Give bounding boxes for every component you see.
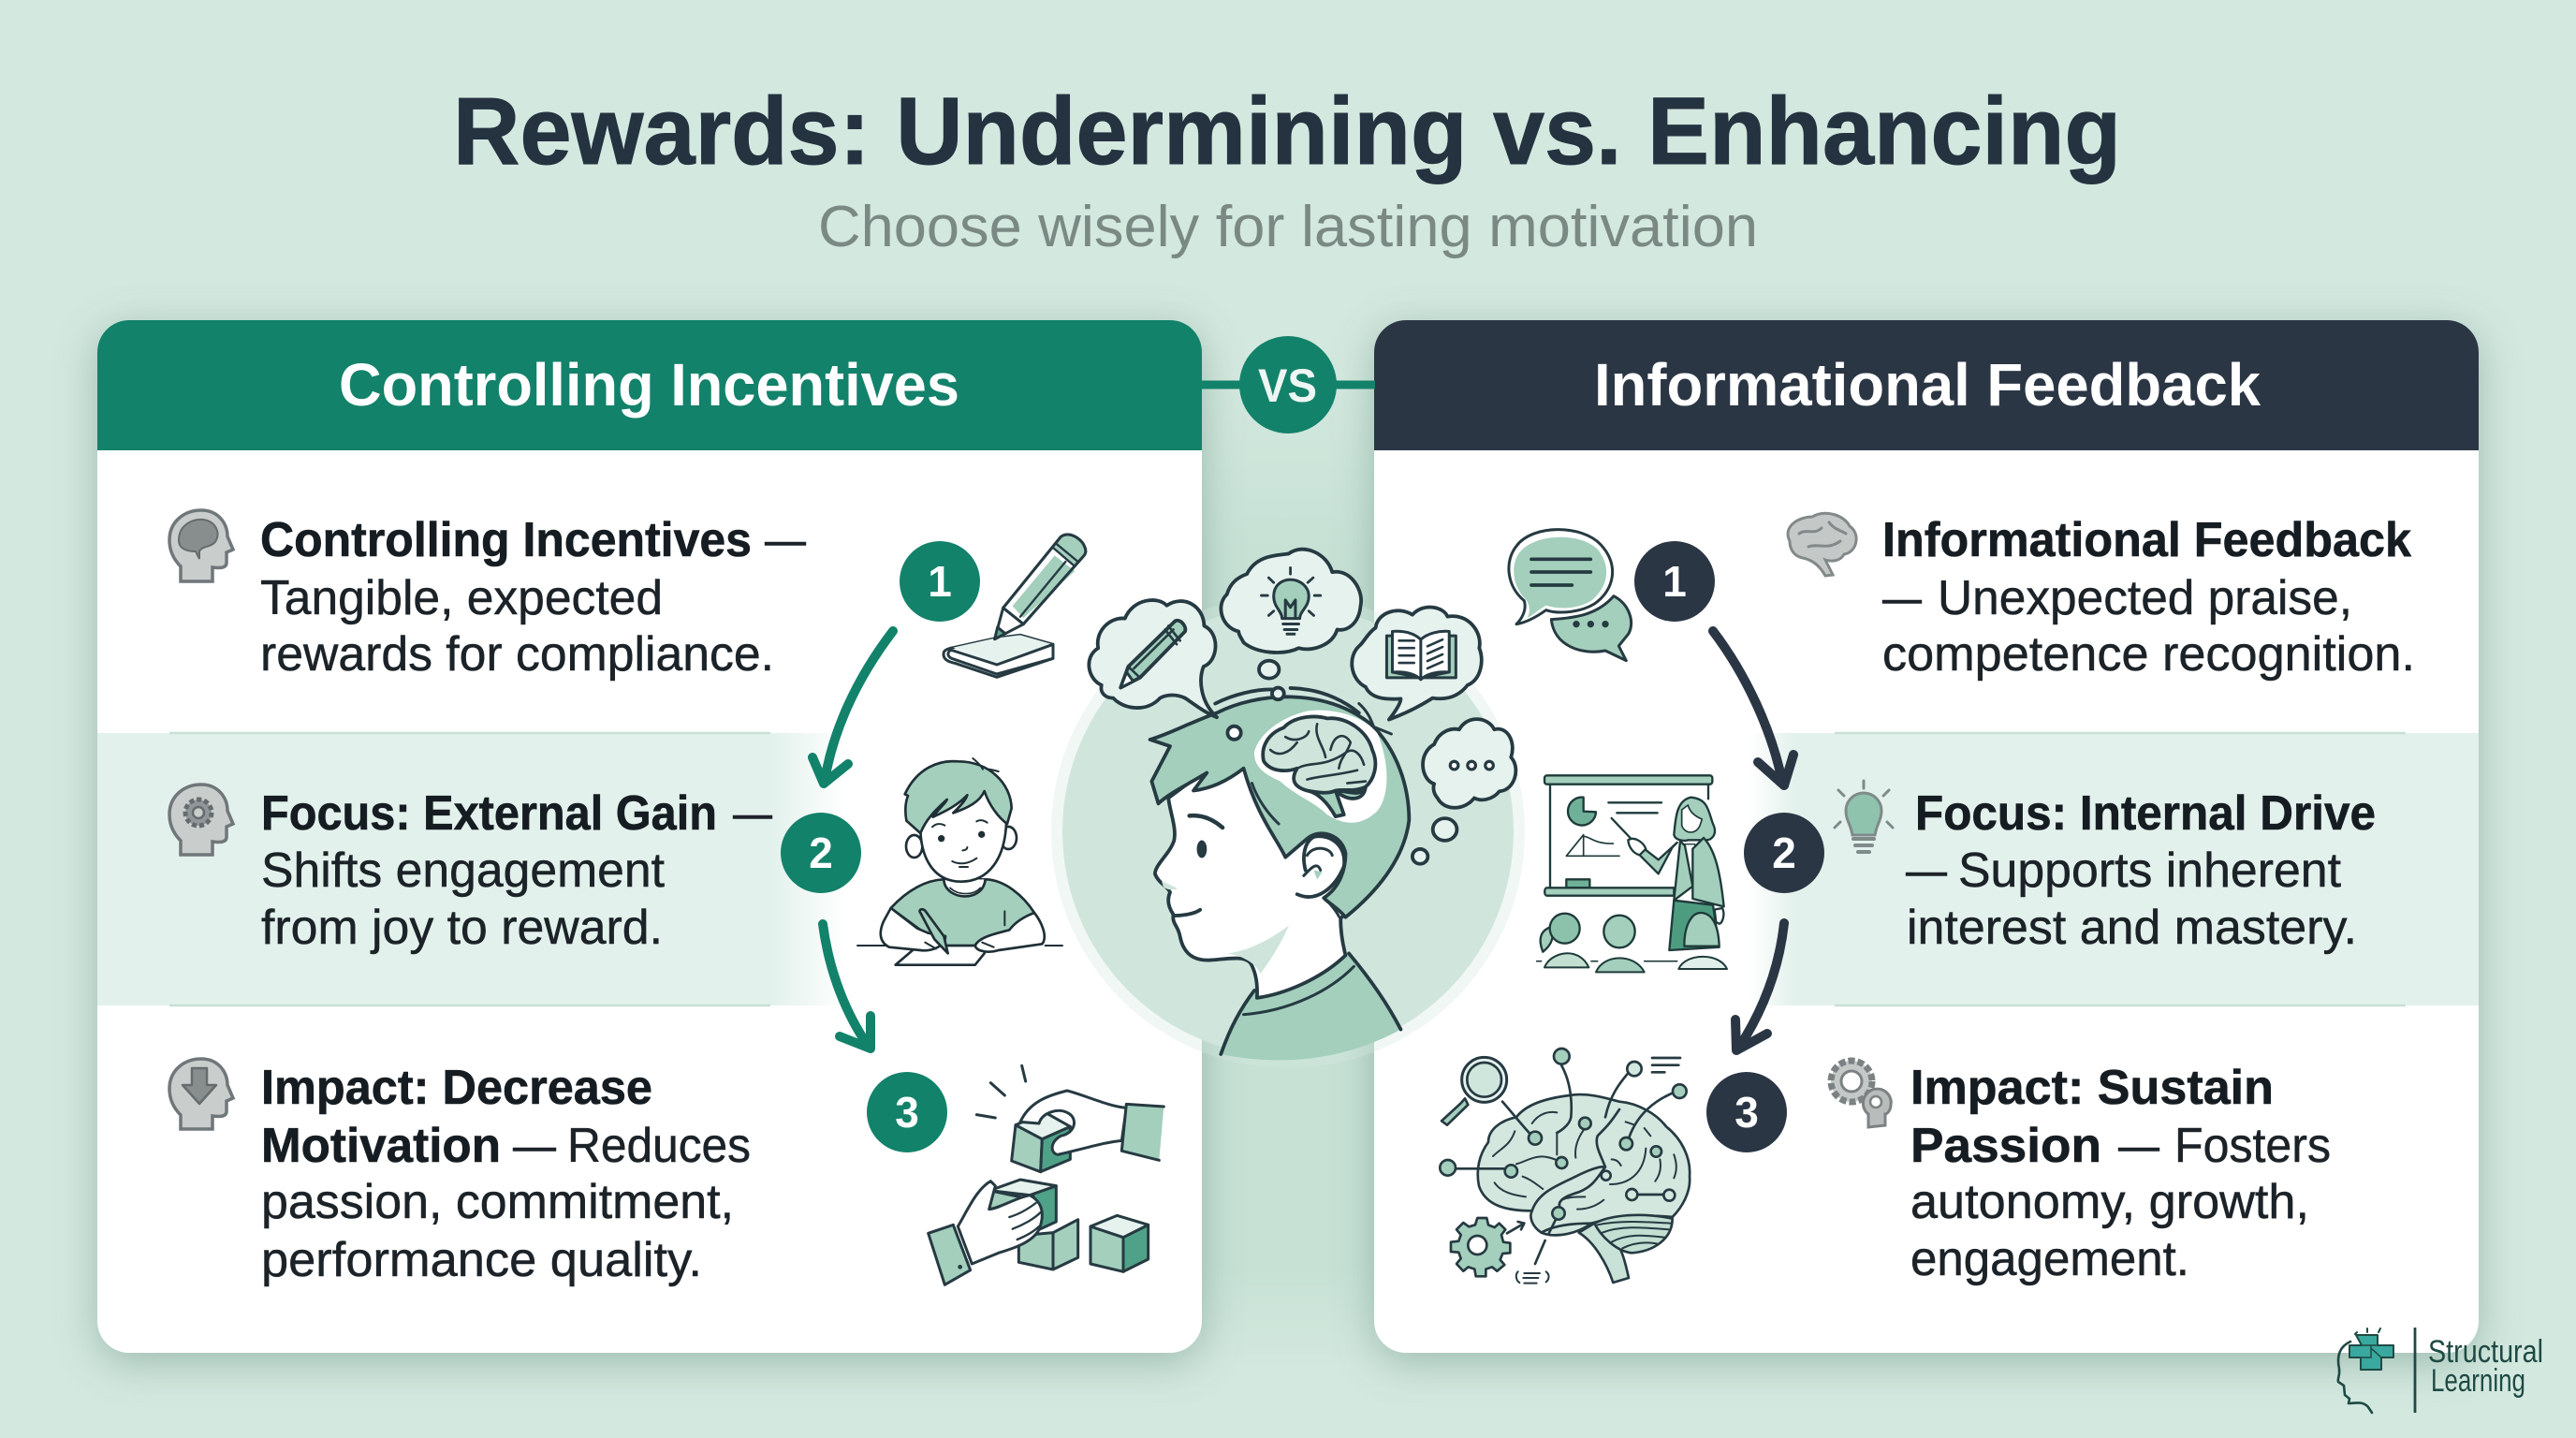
row 1 text — [1882, 513, 2415, 682]
logo: Structural Learning — [2338, 1328, 2543, 1413]
brain highlight — [1254, 711, 1386, 823]
row 2 text: Shifts engagement — [261, 844, 666, 898]
arrow 1 to 2 — [812, 631, 893, 784]
illustration: networked brain — [1440, 1049, 1690, 1284]
illustration: hands with blocks — [929, 1065, 1164, 1284]
middle band — [97, 733, 846, 1005]
step badge 3 — [1706, 1072, 1787, 1152]
logo: Structural Learning: Structural — [2428, 1334, 2543, 1370]
row 1 text: Unexpected praise, — [1938, 571, 2352, 625]
illustration: teacher and students — [1537, 775, 1727, 972]
row 3 text: — — [513, 1119, 556, 1173]
panel header: Controlling Incentives — [339, 351, 959, 418]
row 2 text — [1906, 786, 2376, 955]
panel: controlling incentives — [97, 320, 1202, 1353]
row 3 text — [261, 1061, 751, 1287]
step badge 1 — [900, 541, 980, 622]
icon: head with down arrow — [169, 1059, 233, 1129]
icon: light bulb — [1835, 781, 1893, 852]
title: Rewards: Undermining vs. Enhancing — [453, 78, 2121, 184]
panel header — [1374, 320, 2479, 450]
thought bubble circles — [1227, 661, 1456, 864]
icon: head with gear — [169, 785, 233, 855]
arrow 1 to 2 — [1713, 631, 1793, 785]
step badge 3: 3 — [895, 1088, 919, 1137]
row 2 text: Supports inherent — [1958, 844, 2342, 898]
illustration: child writing — [857, 758, 1062, 965]
row 3 text: Reduces — [567, 1119, 751, 1173]
icon: head with brain — [169, 510, 233, 581]
panel header: Informational Feedback — [1594, 351, 2261, 418]
row 3 text: autonomy, growth, — [1910, 1175, 2309, 1229]
illustration: central circle — [1051, 594, 1525, 1068]
shirt — [1221, 953, 1400, 1060]
step badge 1: 1 — [928, 557, 952, 606]
panel card — [97, 320, 1202, 1353]
cloud: open book — [1352, 607, 1482, 720]
row 3 text — [1910, 1061, 2331, 1286]
panel card — [1374, 320, 2479, 1353]
row 1 text: rewards for compliance. — [260, 627, 774, 682]
vs connector: VS — [1258, 360, 1317, 412]
arrow 2 to 3 — [823, 924, 871, 1049]
logo head icon — [2338, 1328, 2393, 1413]
cloud: pencil — [1089, 600, 1217, 717]
row 1 text: competence recognition. — [1882, 627, 2415, 682]
panel: informational feedback — [1374, 320, 2479, 1353]
cloud: light bulb — [1221, 550, 1361, 653]
row 1 text: — — [1882, 571, 1922, 625]
row 3 text: passion, commitment, — [261, 1175, 734, 1229]
illustration: child profile with thought bubbles — [1089, 550, 1515, 1060]
illustration: speech bubbles — [1509, 530, 1632, 661]
facial features — [1174, 815, 1222, 916]
row 3 text: — — [2118, 1119, 2159, 1173]
step badge 2 — [781, 813, 861, 893]
cloud: dots — [1423, 719, 1515, 808]
hair — [1150, 697, 1409, 917]
step badge 2: 2 — [809, 829, 833, 877]
middle band — [1750, 733, 2479, 1005]
row 3 text: engagement. — [1910, 1232, 2189, 1286]
row 3 text: Fosters — [2174, 1119, 2331, 1173]
brain — [1263, 717, 1375, 816]
vs connector — [1202, 336, 1375, 433]
row 3 text: Impact: Decrease — [261, 1061, 652, 1115]
icon: gear and head — [1831, 1061, 1891, 1127]
subtitle: Choose wisely for lasting motivation — [818, 195, 1758, 259]
row 2 text: interest and mastery. — [1907, 901, 2357, 955]
arrow 2 to 3 — [1735, 923, 1784, 1050]
row 3 text: Impact: Sustain — [1910, 1061, 2274, 1115]
row 1 text — [260, 513, 806, 682]
row 3 text: Passion — [1910, 1119, 2101, 1173]
row 2 text: — — [1906, 844, 1947, 898]
row 1 text: Tangible, expected — [260, 571, 663, 625]
face and neck — [1155, 727, 1364, 1015]
row 3 text: performance quality. — [261, 1233, 702, 1287]
row 2 text: Focus: External Gain — [261, 786, 717, 841]
step badge 3 — [867, 1072, 947, 1152]
row 1 text: Informational Feedback — [1882, 513, 2411, 567]
row 1 text: — — [765, 513, 806, 567]
ear — [1297, 836, 1344, 897]
icon: brain — [1788, 513, 1856, 576]
step badge 2: 2 — [1772, 829, 1796, 877]
illustration: pencil on book — [944, 535, 1086, 677]
row 2 text: from joy to reward. — [261, 901, 663, 955]
step badge 1 — [1634, 541, 1715, 622]
center strip between panels — [1202, 374, 1374, 1367]
step badge 1: 1 — [1662, 557, 1687, 606]
row 3 text: Motivation — [261, 1119, 501, 1173]
step badge 3: 3 — [1734, 1088, 1759, 1137]
row 2 text: — — [733, 786, 772, 841]
step badge 2 — [1744, 813, 1824, 893]
row 2 text: Focus: Internal Drive — [1915, 786, 2376, 841]
row 1 text: Controlling Incentives — [260, 513, 752, 567]
logo: Structural Learning: Learning — [2431, 1363, 2525, 1399]
row 2 text — [261, 786, 772, 955]
panel header — [97, 320, 1202, 450]
